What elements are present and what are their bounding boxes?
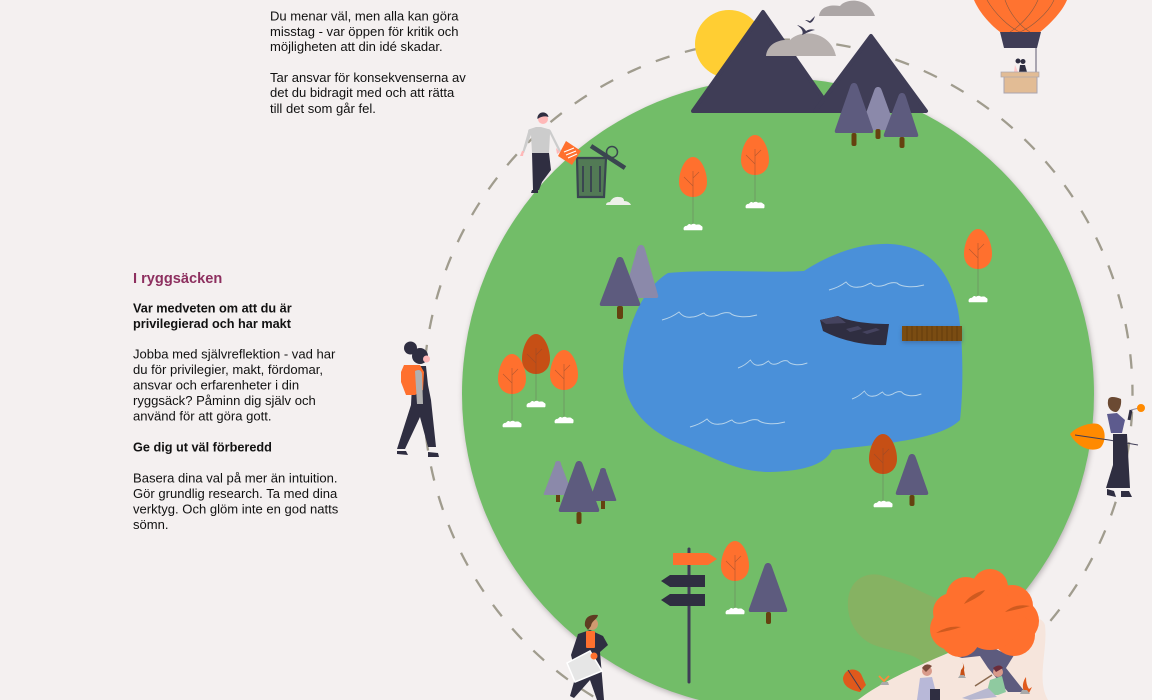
birds bbox=[797, 16, 815, 35]
mountains bbox=[693, 12, 926, 111]
flower bbox=[1131, 404, 1145, 412]
paragraph: medveten: använd för att göra gott. bbox=[133, 408, 272, 424]
man with map bbox=[567, 615, 608, 700]
trunk bbox=[953, 644, 1025, 692]
sun bbox=[695, 10, 763, 78]
paragraph: förberedd: Basera dina val på mer än intuition. bbox=[133, 470, 338, 486]
paragraph: förberedd: verktyg. Och glöm inte en god natts bbox=[133, 502, 339, 516]
cloud: lower bbox=[766, 33, 836, 56]
paragraph: medveten bbox=[133, 302, 336, 424]
text block: ansvar: möjligheten att din idé skadar. bbox=[270, 39, 443, 54]
text block: ansvar bbox=[270, 8, 466, 116]
leaf bbox=[1070, 424, 1105, 450]
pine group: top right bbox=[835, 83, 918, 148]
pine: near signpost bbox=[749, 563, 787, 624]
pine group: lake left bbox=[600, 245, 658, 319]
dark orange trees bbox=[522, 334, 897, 507]
paragraph: medveten: ansvar och erfarenheter i din bbox=[133, 378, 299, 392]
text block: ansvar: Tar ansvar för konsekvenserna av bbox=[270, 70, 466, 85]
paragraph: medveten: du för privilegier, makt, fördomar, bbox=[133, 362, 323, 377]
dark sign lower bbox=[661, 594, 705, 606]
crown bbox=[930, 569, 1039, 657]
green island bbox=[462, 78, 1094, 700]
burner bbox=[1000, 32, 1041, 48]
pine group: lower left bbox=[544, 461, 616, 524]
paragraph: medveten: Jobba med självreflektion - vad har bbox=[133, 346, 336, 362]
small flames bbox=[958, 662, 1032, 694]
big orange tree bbox=[930, 569, 1039, 692]
woman with leaf bbox=[1070, 397, 1145, 497]
pine: near lake right bbox=[896, 454, 928, 506]
hot air balloon bbox=[974, 0, 1067, 93]
orange sign bbox=[673, 553, 717, 565]
text block: ansvar: misstag - var öppen för kritik och bbox=[270, 24, 459, 39]
cloud: upper bbox=[819, 1, 875, 16]
paper bbox=[558, 141, 581, 165]
woman with backpack bbox=[397, 342, 439, 457]
paragraph: förberedd: Gör grundlig research. Ta med dina bbox=[133, 486, 338, 501]
island shadow bbox=[463, 80, 1095, 700]
trash can bbox=[577, 146, 631, 205]
person reclining bbox=[962, 666, 1006, 700]
paragraph: förberedd bbox=[133, 440, 339, 532]
basket bbox=[1004, 76, 1037, 93]
text block: ansvar: till det som går fel. bbox=[270, 101, 376, 116]
text block: ansvar: det du bidragit med och att rätta bbox=[270, 85, 455, 100]
man sitting bbox=[917, 664, 940, 700]
paragraph: förberedd: Ge dig ut väl förberedd bbox=[133, 440, 272, 454]
waves bbox=[662, 282, 924, 427]
signpost bbox=[661, 549, 717, 682]
olive blob bbox=[848, 574, 950, 665]
lake bbox=[623, 244, 962, 472]
dashed path ring bbox=[424, 40, 1132, 700]
text block: ansvar: Du menar väl, men alla kan göra bbox=[270, 8, 459, 24]
orange trees bbox=[498, 135, 992, 614]
bush small bbox=[843, 669, 889, 692]
passengers bbox=[1014, 58, 1027, 72]
dark sign upper bbox=[661, 575, 705, 587]
picnic ground blob bbox=[858, 618, 1048, 700]
heading: I ryggsäcken bbox=[133, 271, 222, 287]
text block: i ryggsäcken bbox=[133, 271, 339, 532]
paragraph: förberedd: sömn. bbox=[133, 517, 169, 532]
paragraph: medveten: privilegierad och har makt bbox=[133, 317, 292, 331]
boat bbox=[820, 316, 889, 345]
person: throwing paper bbox=[520, 112, 581, 193]
envelope bbox=[974, 0, 1067, 32]
paragraph: medveten: Var medveten om att du är bbox=[133, 302, 292, 316]
paragraph: medveten: ryggsäck? Påminn dig själv och bbox=[133, 393, 316, 408]
dock bbox=[902, 326, 962, 343]
